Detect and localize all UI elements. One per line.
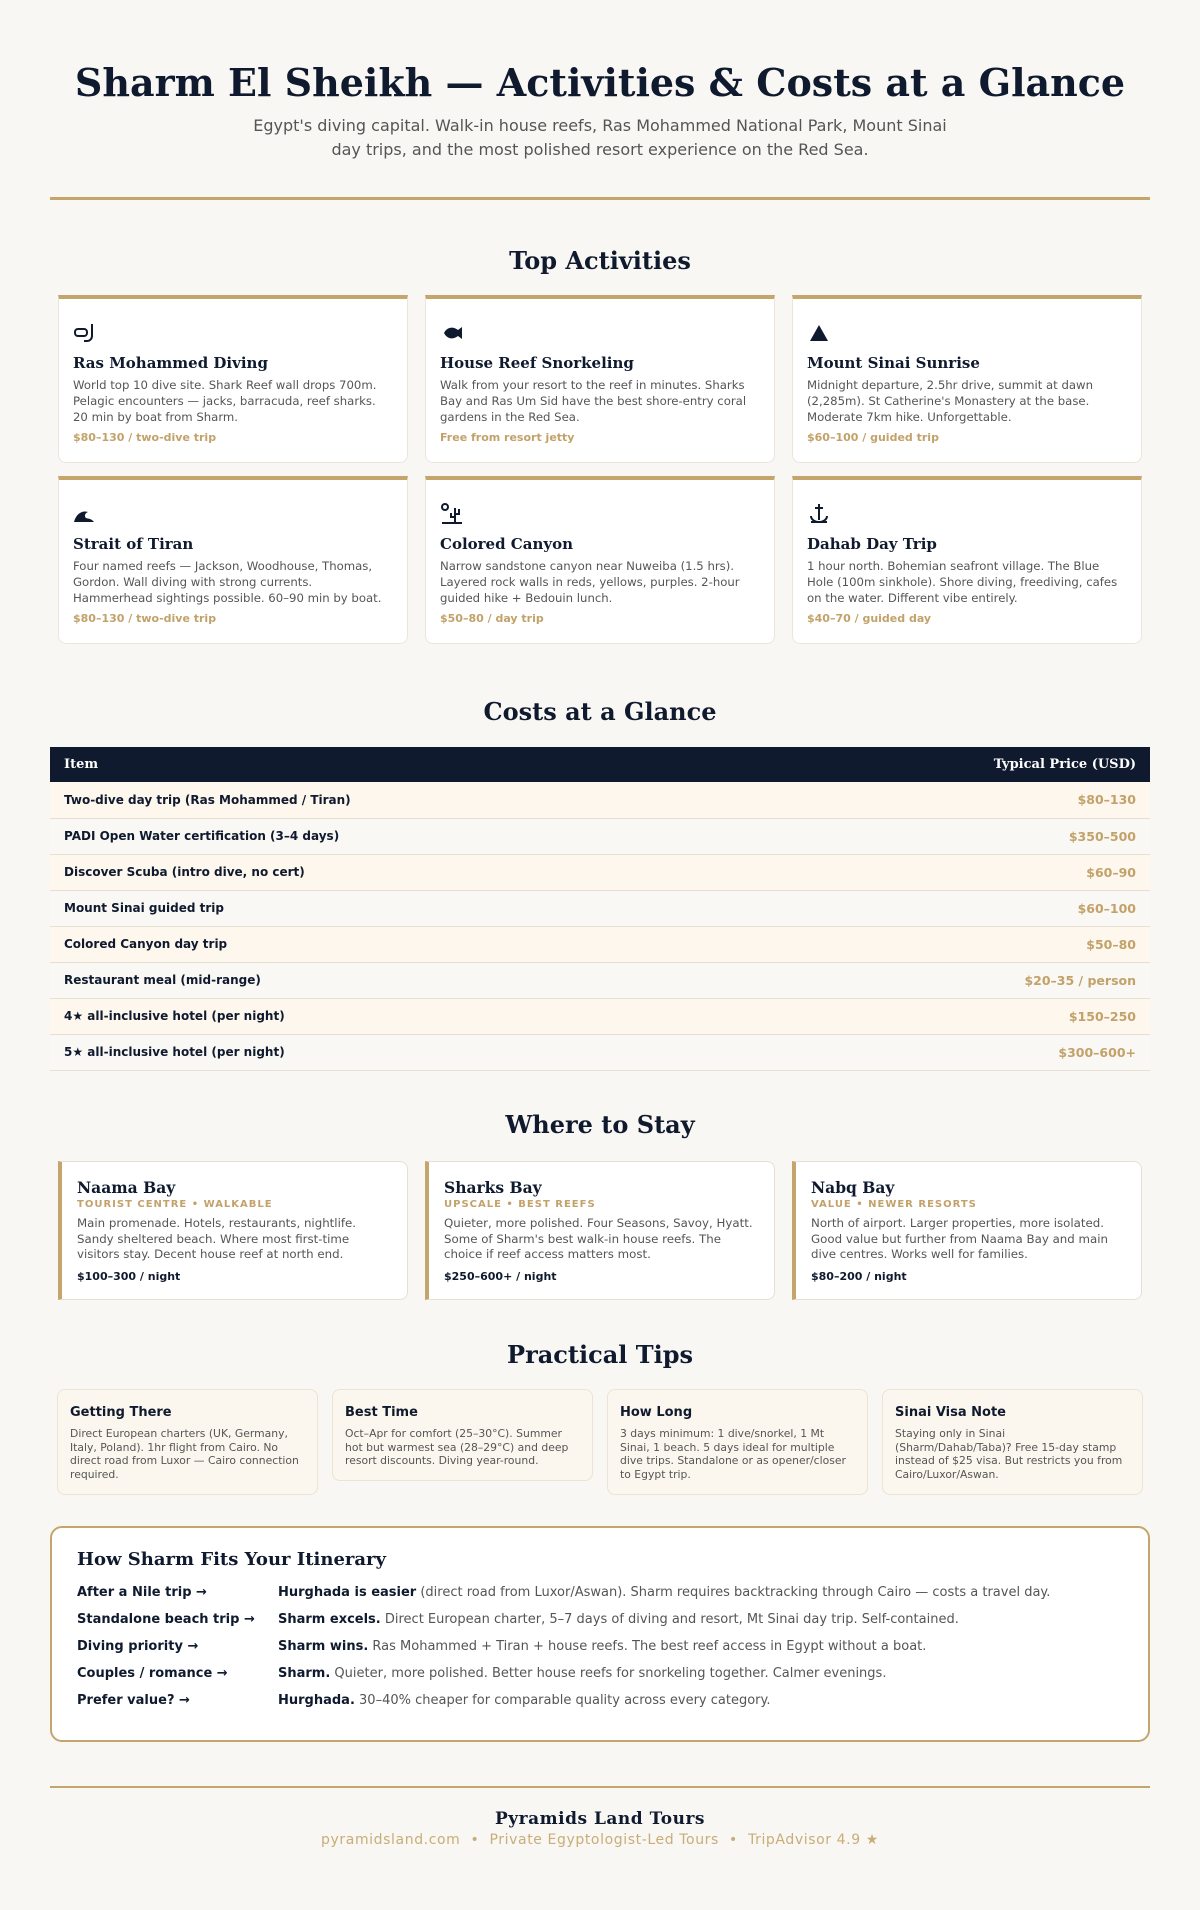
tip: best time: Best Time — [345, 1405, 418, 1420]
card: dahab: Dahab Day Trip — [807, 535, 937, 553]
heading: practical tips: Practical Tips — [507, 1340, 693, 1369]
cost table: Two-dive day trip (Ras Mohammed / Tiran) — [64, 793, 351, 807]
cost table: Item — [64, 757, 98, 772]
card: mount sinai: Midnight departure, 2.5hr drive, summit at dawn (2,285m). St Catherine's Monastery at the base. Moderate 7km hike. Unforgettable. — [807, 378, 1093, 424]
subtitle: Egypt's diving capital. Walk-in house reefs, Ras Mohammed National Park, Mount Sinai — [253, 116, 947, 135]
card: strait of tiran: Four named reefs — Jackson, Woodhouse, Thomas, Gordon. Wall diving with strong currents. Hammerhead sightings possible. 60–90 min by boat. — [73, 559, 381, 605]
cost table: $350–500 — [1069, 828, 1136, 844]
card: house reef snorkeling: Free from resort jetty — [440, 431, 574, 444]
row: diving — [77, 1639, 926, 1654]
stay: nabq bay — [792, 1161, 1142, 1300]
card: colored canyon: Colored Canyon — [440, 535, 573, 553]
stay: sharks bay: Sharks Bay — [444, 1178, 542, 1197]
cost table: $150–250 — [1069, 1008, 1136, 1024]
card: ras mohammed diving — [58, 295, 408, 463]
tip: best time: Oct–Apr for comfort (25–30°C). Summer hot but warmest sea (28–29°C) and deep resort discounts. Diving year-round. — [345, 1427, 568, 1467]
cost table: $300–600+ — [1058, 1044, 1136, 1060]
itinerary box: Prefer value? → — [77, 1693, 190, 1708]
stay: nabq bay: VALUE • NEWER RESORTS — [811, 1199, 977, 1210]
subtitle: day trips, and the most polished resort experience on the Red Sea. — [331, 140, 869, 159]
stay: nabq bay: $80–200 / night — [811, 1270, 907, 1282]
card: colored canyon: $50–80 / day trip — [440, 612, 544, 625]
cost table: Mount Sinai guided trip — [64, 901, 224, 915]
card: ras mohammed diving: $80–130 / two-dive trip — [73, 431, 216, 444]
itinerary box: Hurghada is easier (direct road from Luxor/Aswan). Sharm requires backtracking through Cairo — costs a travel day. — [278, 1585, 1050, 1600]
card: mount sinai: Mount Sinai Sunrise — [807, 354, 980, 372]
card: house reef snorkeling: Walk from your resort to the reef in minutes. Sharks Bay and Ras Um Sid have the best shore-entry coral gardens in the Red Sea. — [440, 378, 746, 424]
stay: naama bay: Main promenade. Hotels, restaurants, nightlife. Sandy sheltered beach. Where most first-time visitors stay. Decent house reef at north end. — [77, 1216, 356, 1261]
cost table: PADI Open Water certification (3–4 days) — [64, 829, 339, 843]
cost table: Colored Canyon day trip — [64, 937, 227, 951]
cost table — [50, 747, 1150, 1071]
card: mount sinai: $60–100 / guided trip — [807, 431, 939, 444]
stay: naama bay: TOURIST CENTRE • WALKABLE — [77, 1199, 273, 1210]
row: value — [77, 1693, 770, 1708]
heading: top activities: Top Activities — [509, 246, 691, 275]
cost table: $50–80 — [1086, 936, 1136, 952]
cost table: $80–130 — [1078, 792, 1136, 807]
itinerary box: After a Nile trip → — [77, 1585, 207, 1600]
card: dahab — [792, 476, 1142, 644]
itinerary box — [50, 1526, 1150, 1742]
card: colored canyon — [425, 476, 775, 644]
card: dahab: $40–70 / guided day — [807, 612, 931, 625]
itinerary box: Sharm wins. Ras Mohammed + Tiran + house reefs. The best reef access in Egypt without a boat. — [278, 1639, 926, 1654]
cost table: $60–100 — [1078, 900, 1136, 916]
stay: sharks bay: Quieter, more polished. Four Seasons, Savoy, Hyatt. Some of Sharm's best walk-in house reefs. The choice if reef access matters most. — [444, 1216, 753, 1261]
tip: how long — [607, 1389, 868, 1495]
card: mount sinai — [792, 295, 1142, 463]
card: strait of tiran: $80–130 / two-dive trip — [73, 612, 216, 625]
tip: getting there: Getting There — [70, 1405, 172, 1420]
stay: naama bay: Naama Bay — [77, 1178, 175, 1197]
card: house reef snorkeling: House Reef Snorkeling — [440, 354, 634, 372]
card: colored canyon: Narrow sandstone canyon near Nuweiba (1.5 hrs). Layered rock walls in reds, yellows, purples. 2-hour guided hike + Bedouin lunch. — [440, 559, 740, 605]
tip: how long: How Long — [620, 1405, 692, 1420]
itinerary box: Diving priority → — [77, 1639, 198, 1654]
cost table: Restaurant meal (mid-range) — [64, 973, 261, 987]
stay: nabq bay: Nabq Bay — [811, 1178, 894, 1197]
itinerary box: Couples / romance → — [77, 1666, 228, 1681]
cost table: $60–90 — [1086, 864, 1136, 880]
cost table: Typical Price (USD) — [994, 757, 1136, 772]
tip: sinai visa: Staying only in Sinai (Sharm/Dahab/Taba)? Free 15-day stamp instead of $25 visa. But restricts you from Cairo/Luxor/Aswan. — [895, 1427, 1122, 1480]
stay: naama bay — [58, 1161, 408, 1300]
subtitle — [253, 116, 947, 159]
tip: sinai visa: Sinai Visa Note — [895, 1405, 1006, 1420]
cost table: 5★ all-inclusive hotel (per night) — [64, 1045, 285, 1059]
heading: costs: Costs at a Glance — [484, 697, 716, 726]
stay: nabq bay: North of airport. Larger properties, more isolated. Good value but further from Naama Bay and main dive centres. Works well for families. — [811, 1216, 1108, 1261]
card: ras mohammed diving: World top 10 dive site. Shark Reef wall drops 700m. Pelagic encounters — jacks, barracuda, reef sharks. 20 min by boat from Sharm. — [73, 378, 376, 424]
itinerary title: How Sharm Fits Your Itinerary — [77, 1549, 386, 1570]
itinerary box: Sharm. Quieter, more polished. Better house reefs for snorkeling together. Calmer evenings. — [278, 1666, 886, 1681]
tip: best time — [332, 1389, 593, 1481]
row: couples — [77, 1666, 886, 1681]
tip: getting there: Direct European charters (UK, Germany, Italy, Poland). 1hr flight from Cairo. No direct road from Luxor — Cairo connection required. — [70, 1427, 299, 1480]
cost table: 4★ all-inclusive hotel (per night) — [64, 1009, 285, 1023]
tip: sinai visa — [882, 1389, 1143, 1495]
footer brand: Pyramids Land Tours — [495, 1809, 705, 1829]
stay: sharks bay: UPSCALE • BEST REEFS — [444, 1199, 596, 1210]
tip: getting there — [57, 1389, 318, 1495]
itinerary box: Sharm excels. Direct European charter, 5–7 days of diving and resort, Mt Sinai day trip. Self-contained. — [278, 1612, 959, 1627]
itinerary box: Hurghada. 30–40% cheaper for comparable quality across every category. — [278, 1693, 770, 1708]
row: standalone — [77, 1612, 959, 1627]
itinerary box: Standalone beach trip → — [77, 1612, 255, 1627]
stay: sharks bay: $250–600+ / night — [444, 1270, 557, 1282]
stay: sharks bay — [425, 1161, 775, 1300]
cost table: $20–35 / person — [1024, 972, 1136, 988]
card: strait of tiran: Strait of Tiran — [73, 535, 193, 553]
card: strait of tiran — [58, 476, 408, 644]
tip: how long: 3 days minimum: 1 dive/snorkel, 1 Mt Sinai, 1 beach. 5 days ideal for multiple dive trips. Standalone or as opener/closer to Egypt trip. — [620, 1427, 846, 1480]
footer links: pyramidsland.com • Private Egyptologist-Led Tours • TripAdvisor 4.9 ★ — [321, 1832, 879, 1848]
card: house reef snorkeling — [425, 295, 775, 463]
cost table: Discover Scuba (intro dive, no cert) — [64, 865, 305, 879]
row: after nile — [77, 1585, 1050, 1600]
heading: where to stay: Where to Stay — [505, 1110, 695, 1139]
stay: naama bay: $100–300 / night — [77, 1270, 180, 1282]
card: ras mohammed diving: Ras Mohammed Diving — [73, 354, 268, 372]
title: Sharm El Sheikh — Activities & Costs at a Glance — [75, 60, 1125, 105]
card: dahab: 1 hour north. Bohemian seafront village. The Blue Hole (100m sinkhole). Shore diving, freediving, cafes on the water. Different vibe entirely. — [807, 559, 1117, 605]
